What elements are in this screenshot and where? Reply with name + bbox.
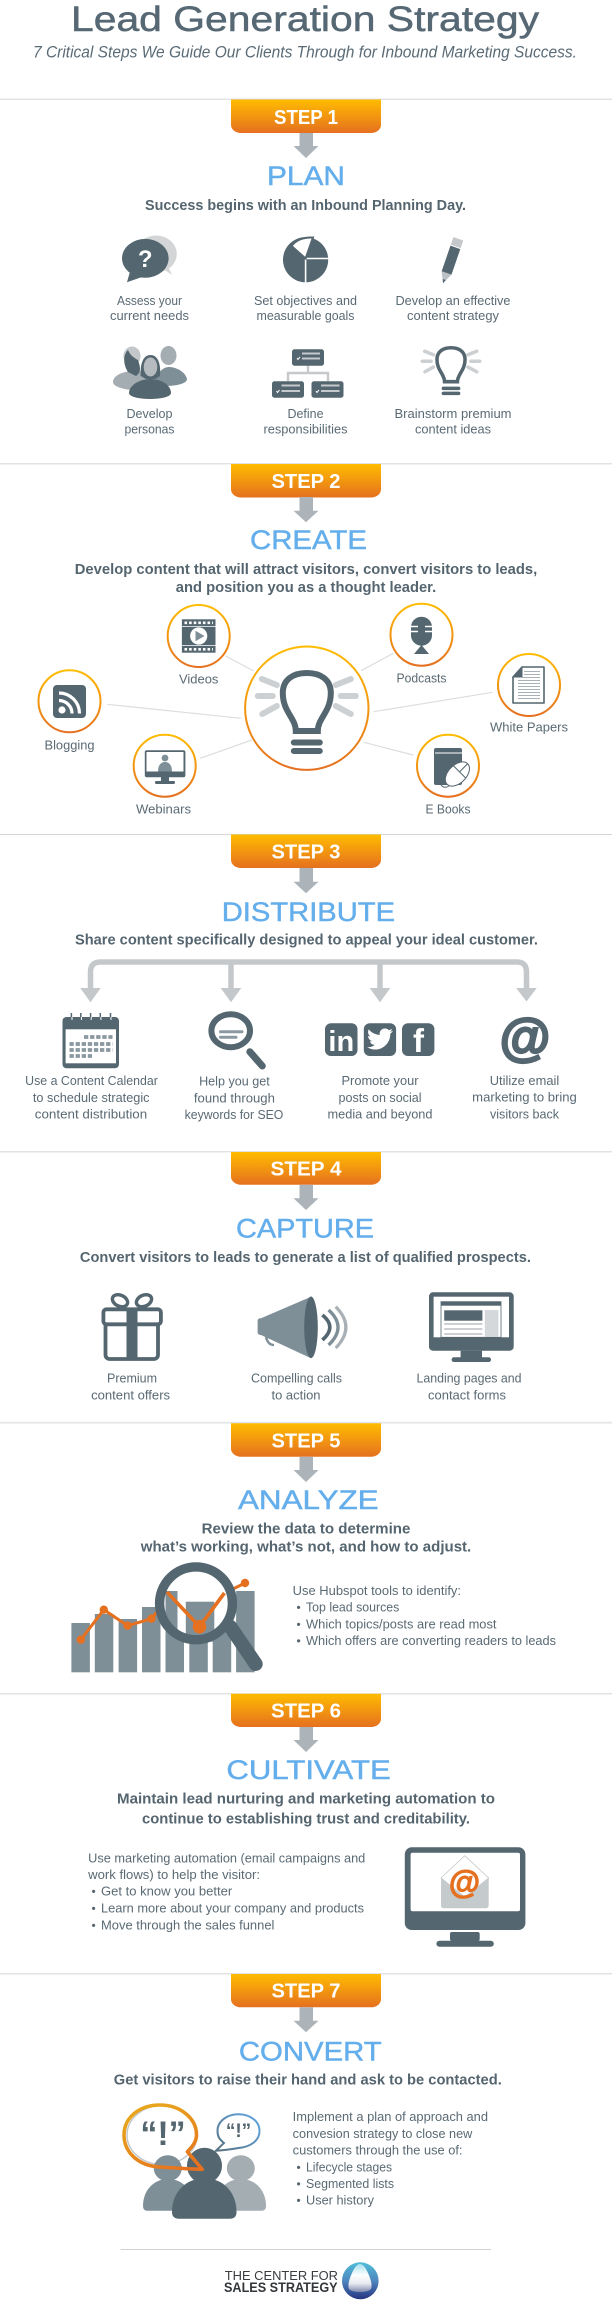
label: Compelling calls — [251, 1371, 342, 1385]
icon: people with speech bubbles: “!” — [140, 2115, 186, 2153]
intro text: Maintain lead nurturing and marketing automation to — [117, 1791, 495, 1807]
step 3 badge — [231, 834, 381, 868]
icon: personas — [113, 346, 187, 399]
text: hubspot tools: Which topics/posts are read most — [306, 1617, 497, 1631]
label: media and beyond — [328, 1108, 433, 1122]
icon: org chart — [272, 349, 344, 398]
arrow — [294, 1727, 318, 1752]
icon: gift — [103, 1292, 161, 1360]
step 2 badge: STEP 2 — [272, 471, 340, 493]
text: marketing automation: Learn more about your company and products — [101, 1902, 364, 1916]
step 7 badge — [231, 1974, 381, 2007]
label: visitors back — [490, 1107, 560, 1121]
intro text: what’s working, what’s not, and how to adjust. — [140, 1539, 471, 1555]
node: podcasts — [390, 604, 452, 686]
text: marketing automation — [87, 1851, 365, 1932]
text: hubspot tools — [293, 1584, 556, 1648]
label: Landing pages and — [416, 1371, 522, 1385]
intro text — [140, 1521, 471, 1555]
logo: the center for sales strategy — [224, 2262, 379, 2299]
logo: the center for sales strategy: THE CENTER FOR — [225, 2268, 338, 2283]
label: marketing to bring — [472, 1091, 577, 1105]
label — [254, 294, 357, 323]
icon: social media: f — [413, 1022, 425, 1059]
label: content strategy — [407, 309, 500, 323]
node: webinars: Webinars — [136, 802, 191, 816]
node: blogging: Blogging — [44, 738, 95, 752]
text: convert strategy: Lifecycle stages — [306, 2160, 392, 2174]
icon: monitor with email — [405, 1847, 525, 1947]
step 6 badge — [231, 1694, 381, 1727]
text: marketing automation: Get to know you better — [101, 1885, 232, 1899]
logo: the center for sales strategy: SALES STRATEGY — [224, 2280, 338, 2295]
intro text — [75, 562, 537, 596]
label — [264, 407, 348, 436]
panel: step 7 convert — [0, 1973, 612, 2219]
label: Promote your — [342, 1074, 418, 1088]
label: measurable goals — [256, 309, 354, 323]
step 3 badge: STEP 3 — [272, 842, 340, 864]
label: Develop — [126, 407, 173, 421]
label — [185, 1074, 284, 1122]
panel: step 4 capture — [0, 1151, 612, 1402]
text: convert strategy — [293, 2110, 488, 2208]
intro text: Share content specifically designed to appeal your ideal customer. — [75, 932, 538, 948]
label: current needs — [110, 309, 189, 323]
text: marketing automation: Use marketing automation (email campaigns and — [88, 1851, 365, 1865]
icon: people with speech bubbles — [124, 2105, 266, 2219]
arrow — [294, 868, 318, 893]
heading: convert: CONVERT — [239, 2037, 382, 2067]
subtitle: 7 Critical Steps We Guide Our Clients Through for Inbound Marketing Success. — [33, 42, 577, 62]
title: Lead Generation Strategy — [71, 0, 540, 39]
icon: landing page monitor — [429, 1292, 514, 1362]
step 4 badge: STEP 4 — [270, 1159, 342, 1181]
label: contact forms — [428, 1388, 506, 1402]
label: content ideas — [415, 422, 491, 436]
intro text: Convert visitors to leads to generate a list of qualified prospects. — [80, 1250, 531, 1266]
intro text: Success begins with an Inbound Planning Day. — [145, 198, 466, 214]
label: content distribution — [35, 1108, 147, 1122]
node: videos: Videos — [179, 672, 218, 686]
label — [394, 407, 512, 436]
label: content offers — [91, 1388, 170, 1402]
node: videos — [168, 605, 230, 686]
branching arrows — [80, 962, 537, 1002]
heading: distribute: DISTRIBUTE — [222, 897, 395, 927]
icon: question bubbles — [122, 236, 177, 282]
node: e books: E Books — [426, 802, 470, 816]
text: convert strategy: User history — [306, 2194, 375, 2208]
intro text: continue to establishing trust and creditability. — [142, 1812, 470, 1828]
step 5 badge: STEP 5 — [272, 1430, 340, 1452]
node: blogging — [38, 670, 100, 752]
intro text: Develop content that will attract visitors, convert visitors to leads, — [75, 562, 537, 578]
text: convert strategy: convesion strategy to close new — [293, 2127, 473, 2141]
icon: at sign: @ — [500, 1009, 550, 1067]
text: marketing automation: • — [92, 1885, 96, 1899]
arrow — [294, 1185, 318, 1210]
icon: people with speech bubbles: “!” — [226, 2121, 251, 2142]
panel: step 6 cultivate — [0, 1693, 612, 1947]
node: white papers: White Papers — [490, 721, 568, 735]
panel: step 3 distribute — [0, 834, 612, 1122]
label: Use a Content Calendar — [25, 1074, 158, 1088]
arrow — [294, 133, 318, 158]
node: white papers — [490, 654, 568, 735]
label: Define — [288, 407, 324, 421]
text: marketing automation: • — [92, 1918, 96, 1932]
label: responsibilities — [264, 422, 348, 436]
text: marketing automation: Move through the sales funnel — [101, 1918, 274, 1932]
step 1 badge — [231, 100, 381, 133]
icon: calendar — [62, 1013, 119, 1068]
arrow — [294, 2007, 318, 2032]
icon: light bulb — [422, 348, 480, 393]
node: webinars — [134, 735, 196, 816]
icon: question bubbles: ? — [138, 246, 153, 273]
step 4 badge — [231, 1152, 381, 1185]
heading: analyze: ANALYZE — [238, 1485, 379, 1515]
text: marketing automation: work flows) to help the visitor: — [87, 1868, 260, 1882]
text: hubspot tools: • — [296, 1634, 301, 1648]
arrow — [294, 1457, 318, 1482]
text: marketing automation: • — [92, 1902, 96, 1916]
text: hubspot tools: • — [296, 1617, 301, 1631]
heading: plan: PLAN — [267, 161, 345, 191]
label: Premium — [107, 1371, 157, 1385]
label: Develop an effective — [396, 294, 511, 308]
label — [472, 1074, 577, 1121]
label: personas — [124, 422, 174, 436]
label — [416, 1371, 522, 1402]
intro text: Review the data to determine — [202, 1521, 410, 1537]
heading: create: CREATE — [250, 525, 367, 555]
text: convert strategy: • — [296, 2160, 301, 2174]
text: convert strategy: • — [296, 2177, 301, 2191]
icon: pie chart — [283, 237, 330, 284]
step 6 badge: STEP 6 — [271, 1700, 341, 1722]
intro text: Get visitors to raise their hand and ask to be contacted. — [114, 2073, 502, 2089]
label: Set objectives and — [254, 294, 357, 308]
text: hubspot tools: • — [296, 1601, 301, 1615]
central bulb — [245, 646, 368, 770]
step 2 badge — [231, 464, 381, 498]
intro text: and position you as a thought leader. — [176, 580, 436, 596]
text: convert strategy: customers through the use of: — [293, 2144, 462, 2158]
label: to schedule strategic — [33, 1091, 150, 1105]
label: to action — [272, 1388, 321, 1402]
text: convert strategy: • — [296, 2194, 301, 2208]
text: convert strategy: Implement a plan of approach and — [293, 2110, 488, 2124]
label: Brainstorm premium — [394, 407, 512, 421]
icon: social media — [325, 1022, 434, 1059]
label: found through — [194, 1091, 275, 1105]
label — [396, 294, 511, 323]
label: Help you get — [199, 1074, 270, 1088]
step 1 badge: STEP 1 — [274, 107, 338, 129]
arrow — [294, 497, 318, 522]
label: keywords for SEO — [185, 1108, 284, 1122]
text: convert strategy: Segmented lists — [306, 2177, 394, 2191]
label — [328, 1074, 433, 1122]
icon: magnifier — [211, 1014, 262, 1066]
text: hubspot tools: Which offers are converting readers to leads — [306, 1634, 556, 1648]
text: hubspot tools: Use Hubspot tools to identify: — [293, 1584, 461, 1598]
panel: step 1 plan — [0, 99, 612, 436]
panel: step 2 create — [0, 463, 612, 816]
node: podcasts: Podcasts — [396, 672, 446, 686]
label: Assess your — [117, 294, 182, 308]
label — [91, 1371, 170, 1402]
label: posts on social — [338, 1091, 422, 1105]
step 7 badge: STEP 7 — [272, 1981, 340, 2003]
chart: bars with magnifier — [71, 1567, 256, 1672]
node: e books — [417, 735, 479, 816]
step 5 badge — [231, 1423, 381, 1457]
icon: monitor with email: @ — [449, 1864, 480, 1900]
heading: cultivate: CULTIVATE — [226, 1755, 391, 1785]
label: Utilize email — [490, 1074, 559, 1088]
label — [124, 407, 174, 436]
icon: social media: in — [328, 1026, 354, 1058]
label — [25, 1074, 158, 1122]
label — [251, 1371, 342, 1402]
heading: capture: CAPTURE — [236, 1213, 374, 1243]
icon: pencil — [438, 237, 463, 285]
panel: step 5 analyze — [0, 1422, 612, 1672]
text: hubspot tools: Top lead sources — [306, 1601, 399, 1615]
icon: megaphone — [258, 1296, 346, 1358]
label — [110, 294, 189, 323]
connector lines — [107, 653, 493, 758]
intro text — [117, 1791, 495, 1828]
